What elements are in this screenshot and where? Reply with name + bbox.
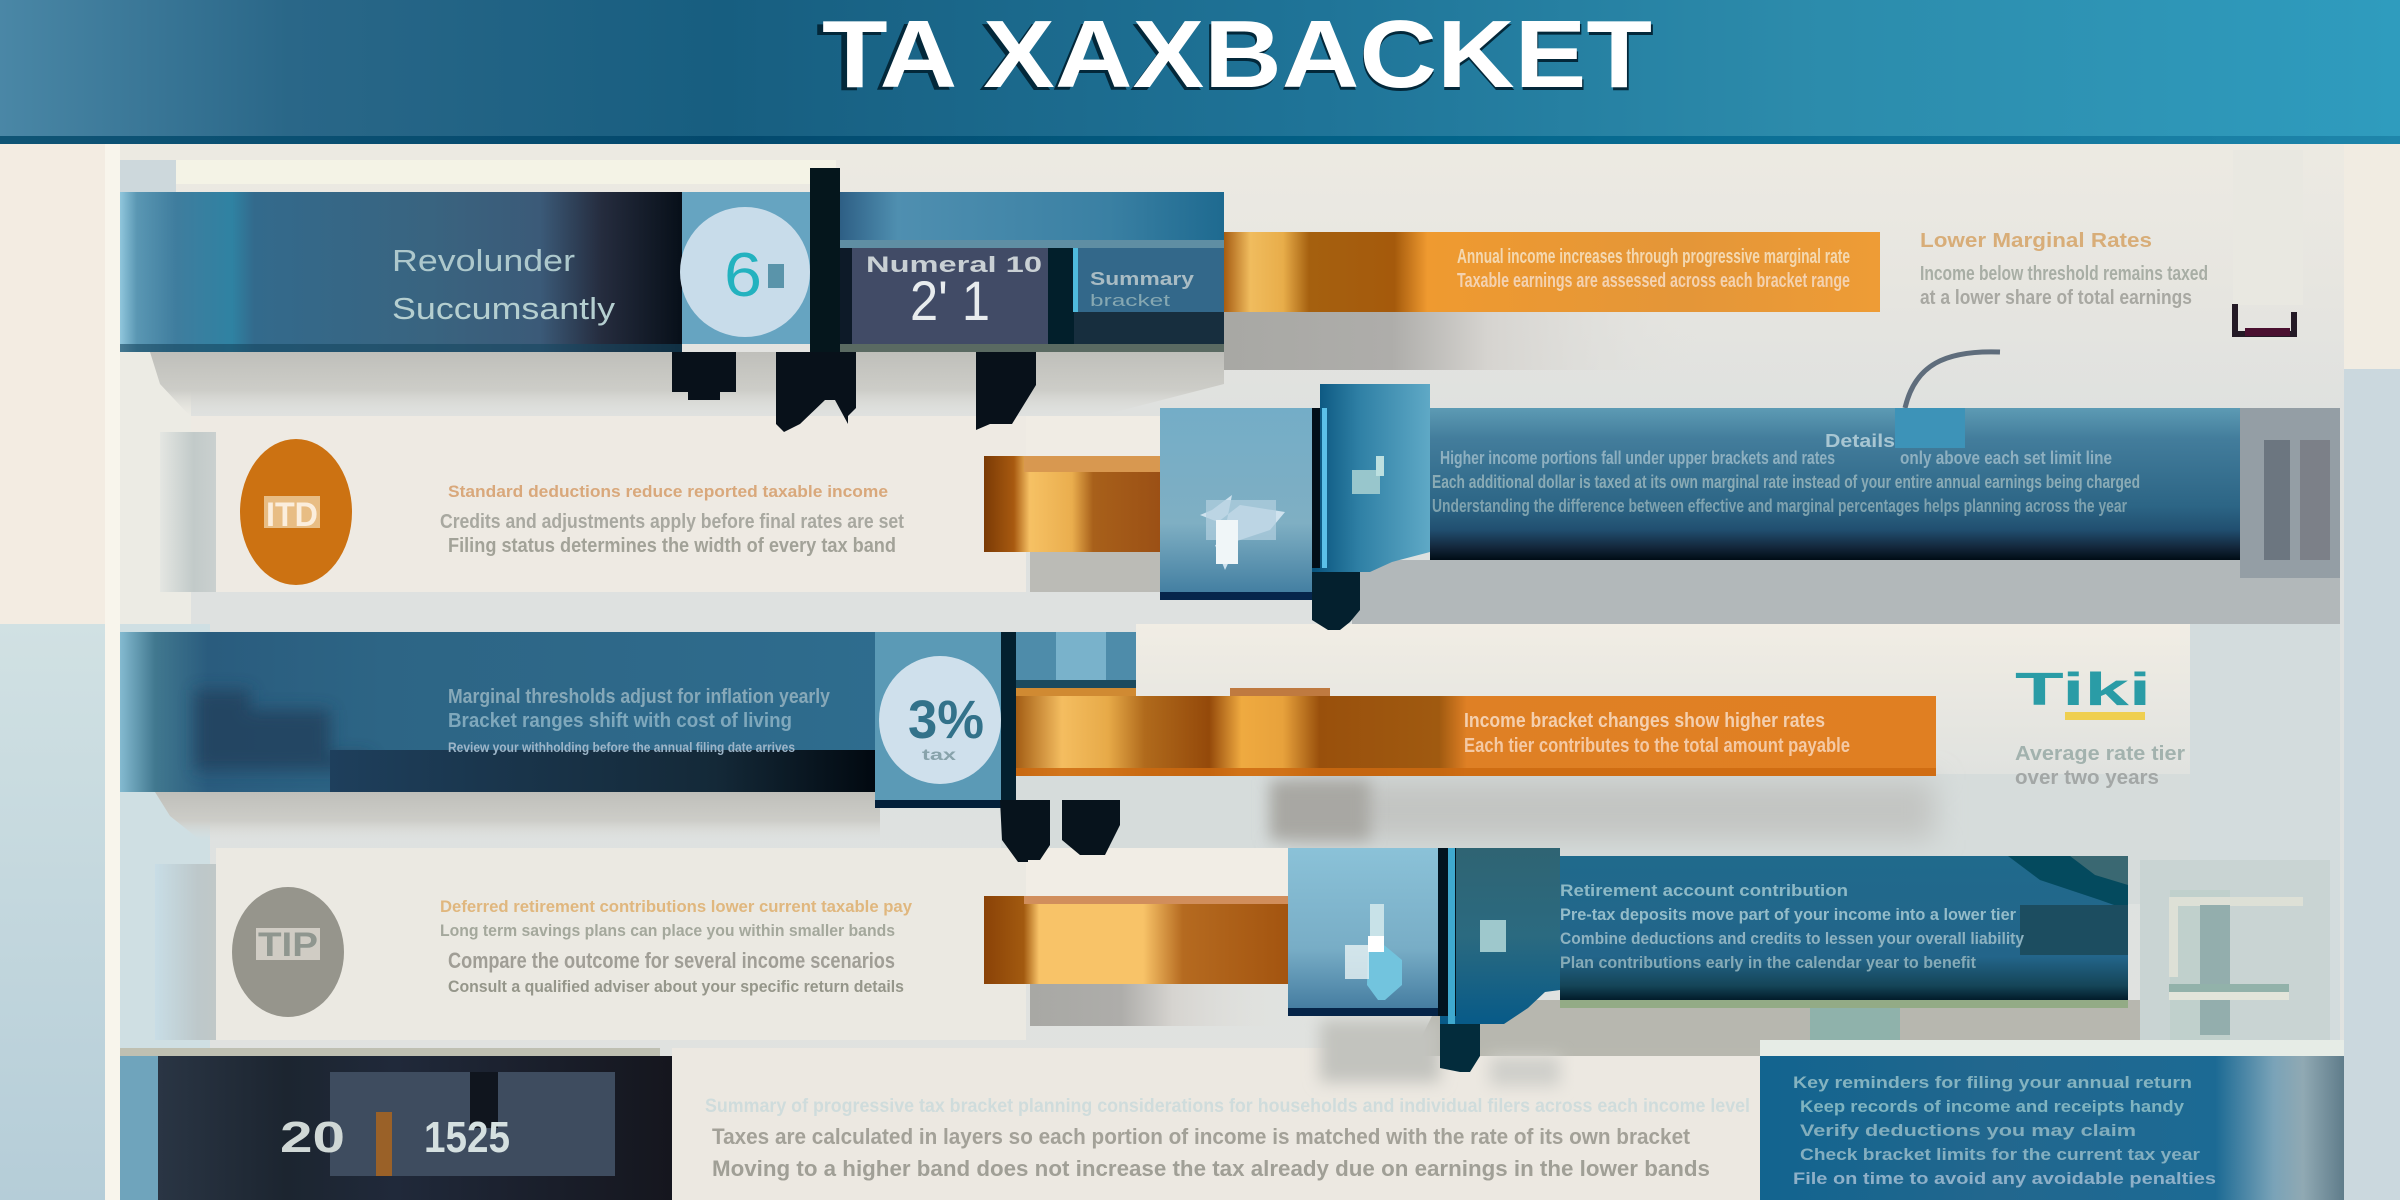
panel: bottom-right blue notes — [1760, 1040, 2344, 1200]
text block: row 4: Compare the outcome for several income scenarios — [448, 948, 895, 973]
ribbon: row 2 orange connector — [984, 456, 1160, 592]
ribbon: row 1 orange callout: Annual income increases through progressive marginal rate — [1457, 246, 1850, 268]
text block: row 4 — [440, 897, 913, 996]
icon: grey badge — [232, 887, 344, 1017]
banner shadow — [155, 792, 880, 840]
badge: row 3 percent circle: tax — [922, 747, 956, 764]
panel: row 1 blue banner — [120, 192, 1224, 416]
text block: row 2: Standard deductions reduce reported taxable income — [448, 482, 888, 501]
ribbon: row 4 orange connector — [984, 896, 1290, 1026]
badge: row 3 percent circle — [875, 632, 1001, 808]
panel: row 2 icon block — [1160, 408, 1312, 600]
panel: row 2 blue banner: only above each set limit line — [1900, 448, 2112, 468]
panel: row 2 blue banner: Higher income portions fall under upper brackets and rates — [1440, 448, 1835, 468]
icon: scale glyph — [1200, 495, 1285, 570]
panel: bottom-left dark stat: 1525 — [424, 1113, 510, 1162]
banner shadow — [1352, 560, 2340, 624]
text block: row 2 — [440, 482, 904, 557]
title: TA XAXBACKET — [816, 4, 1654, 111]
text block: row 2: Filing status determines the width of every tax band — [448, 535, 896, 557]
panel: bottom-left dark stat — [120, 1048, 672, 1200]
tab: row 4 pointer tab — [1438, 848, 1560, 1072]
panel: row 1 blue banner: Revolunder — [392, 243, 575, 278]
text block: row 3 notes: Tiki — [2015, 663, 2151, 715]
panel: bottom-right blue notes: Key reminders for filing your annual return — [1793, 1073, 2192, 1092]
panel: bottom-left dark stat: 20 — [280, 1113, 345, 1162]
panel: bottom-right blue notes: Check bracket limits for the current tax year — [1800, 1145, 2200, 1164]
ribbon: row 1 orange callout: Taxable earnings are assessed across each bracket range — [1457, 270, 1850, 292]
text block: row 1 notes: Lower Marginal Rates — [1920, 230, 2152, 252]
decoration: right ledger frame — [2140, 860, 2330, 1040]
icon: orange badge — [240, 439, 352, 585]
panel: row 2 blue banner: Each additional dollar is taxed at its own marginal rate instead of your entire annual earnings being charged — [1432, 472, 2140, 492]
badge: row 3 percent circle: 3% — [908, 690, 984, 750]
panel: row 4 blue banner: Pre-tax deposits move part of your income into a lower tier — [1560, 905, 2016, 924]
panel: row 4 cream card — [155, 848, 1288, 1040]
panel: row 1 data box: Numeral 10 — [866, 252, 1042, 277]
text block: row 3 notes: Average rate tier — [2015, 743, 2185, 765]
panel: row 1 data box — [810, 168, 1224, 352]
pointers: row 3 — [1000, 800, 1120, 862]
panel: row 4 blue banner: Combine deductions and credits to lessen your overall liability — [1560, 929, 2024, 948]
text block: row 3 notes: over two years — [2015, 767, 2159, 789]
title: TA XAXBACKET — [822, 1, 1652, 108]
panel: row 2 blue banner: Details — [1825, 431, 1895, 451]
text block: row 4: Deferred retirement contributions lower current taxable pay — [440, 897, 913, 916]
text block: row 4: Long term savings plans can place you within smaller bands — [440, 921, 895, 940]
panel: bottom text card — [672, 1048, 1762, 1200]
text block: row 1 notes: Income below threshold remains taxed — [1920, 263, 2208, 285]
badge: row 1 circle — [680, 192, 810, 344]
text block: row 1 notes: at a lower share of total earnings — [1920, 287, 2192, 309]
panel: bottom-right blue notes: Verify deductions you may claim — [1800, 1121, 2136, 1140]
text block: row 2: Credits and adjustments apply before final rates are set — [440, 511, 904, 533]
panel: row 4 blue banner — [1320, 856, 2140, 1086]
panel: row 2 blue banner: Understanding the difference between effective and marginal percentages helps planning across the year — [1432, 496, 2127, 516]
icon: orange badge: ITD — [266, 496, 318, 534]
icon: person shield — [1345, 904, 1402, 1000]
panel: row 3 blue banner: Review your withholding before the annual filing date arrives — [448, 739, 795, 755]
panel: bottom-right blue notes: Keep records of income and receipts handy — [1800, 1097, 2185, 1116]
badge: row 1 circle: 6 — [724, 241, 762, 310]
panel: row 4 blue banner: Plan contributions early in the calendar year to benefit — [1560, 953, 1976, 972]
panel: row 2 blue banner — [1352, 408, 2340, 624]
ribbon: row 3 orange callout — [1016, 632, 1936, 840]
panel: row 3 blue banner: Bracket ranges shift with cost of living — [448, 710, 792, 732]
panel: row 2 cream card — [160, 416, 1026, 592]
ribbon: row 1 orange callout — [1224, 232, 1880, 370]
dark rule: row 3 — [1001, 632, 1016, 800]
panel: row 3 blue banner: Marginal thresholds adjust for inflation yearly — [448, 686, 831, 708]
panel: row 4 blue banner: Retirement account contribution — [1560, 881, 1848, 900]
panel: bottom text card: Summary of progressive tax bracket planning considerations for households and individual filers across each income level — [705, 1096, 1750, 1117]
panel: row 1 data box: bracket — [1090, 291, 1170, 310]
ribbon: row 3 orange callout: Each tier contributes to the total amount payable — [1464, 735, 1850, 757]
panel: row 4 icon block — [1288, 848, 1438, 1016]
banner shadow — [1420, 1000, 2140, 1056]
panel: bottom text card: Taxes are calculated in layers so each portion of income is matched with the rate of its own bracket — [712, 1124, 1691, 1149]
icon: grey badge: TIP — [258, 926, 318, 964]
text block: row 4: Consult a qualified adviser about your specific return details — [448, 977, 904, 996]
text block: row 1 notes — [1920, 230, 2208, 309]
panel: row 1 data box: Summary — [1090, 269, 1194, 289]
panel: row 1 data box: 2' 1 — [910, 269, 990, 332]
pointers: row 1 — [672, 352, 1036, 432]
ribbon: row 3 orange callout: Income bracket changes show higher rates — [1464, 710, 1825, 732]
text block: row 3 notes — [2015, 663, 2185, 789]
panel: bottom-right blue notes: File on time to avoid any avoidable penalties — [1793, 1169, 2216, 1188]
panel: row 3 blue banner — [120, 632, 880, 840]
tab: row 2 pointer tab — [1312, 384, 1430, 630]
panel: bottom text card: Moving to a higher band does not increase the tax already due on earnings in the lower bands — [712, 1156, 1710, 1181]
banner shadow — [150, 352, 1224, 416]
panel: row 1 blue banner: Succumsantly — [392, 291, 616, 326]
curved arrow — [1905, 352, 2000, 408]
header band — [0, 0, 2400, 144]
decoration: right bracket — [2233, 150, 2303, 336]
